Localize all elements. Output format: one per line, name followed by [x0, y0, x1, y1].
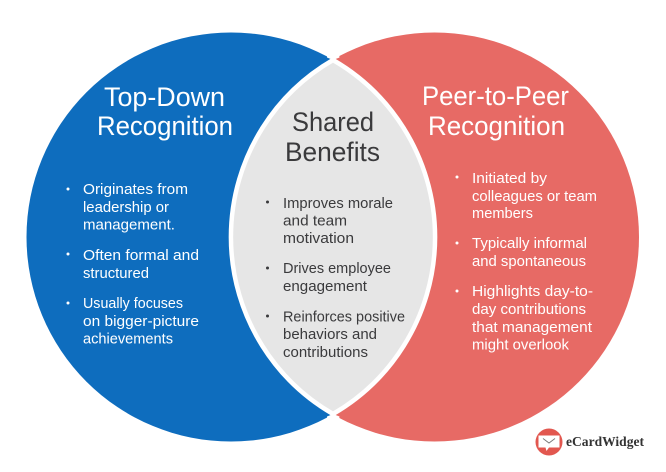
heading: shared benefits: Shared [292, 107, 374, 137]
text block: peer-to-peer bullet list: members [472, 206, 533, 222]
text block: top-down bullet list: achievements [83, 332, 173, 348]
text block: shared benefits bullet list: behaviors and [283, 327, 377, 343]
text block: shared benefits bullet list: engagement [283, 279, 367, 295]
heading: shared benefits [285, 107, 380, 167]
heading: peer-to-peer recognition [422, 81, 569, 141]
text block: shared benefits bullet list: motivation [283, 231, 354, 247]
text block: shared benefits bullet list: Improves morale [283, 196, 393, 212]
text block: peer-to-peer bullet list: that management [472, 320, 592, 336]
text block: peer-to-peer bullet list [456, 171, 597, 354]
text block: shared benefits bullet list [266, 196, 405, 361]
text block: top-down bullet list: management. [83, 218, 175, 234]
panel: shared benefits overlap [231, 60, 435, 414]
text block: top-down bullet list: Often formal and [83, 248, 199, 264]
heading: shared benefits: Benefits [285, 137, 380, 167]
text block: shared benefits bullet list: Drives employee [283, 261, 391, 277]
text block: peer-to-peer bullet list: Typically informal [472, 236, 587, 252]
heading: peer-to-peer recognition: Recognition [428, 111, 565, 141]
text block: peer-to-peer bullet list: day contributions [472, 302, 586, 318]
text block: top-down bullet list [66, 182, 199, 348]
logo: eCardWidget [536, 428, 644, 456]
heading: peer-to-peer recognition: Peer-to-Peer [422, 81, 569, 111]
panel: top-down recognition circle [26, 32, 436, 442]
text block: peer-to-peer bullet list: Initiated by [472, 171, 548, 187]
text block: shared benefits bullet list: and team [283, 214, 347, 230]
heading: top-down recognition: Top-Down [104, 82, 225, 112]
text block: peer-to-peer bullet list: colleagues or team [472, 189, 597, 205]
text block: peer-to-peer bullet list: Highlights day-to- [472, 284, 593, 300]
text block: top-down bullet list: on bigger-picture [83, 314, 199, 330]
logo wordmark: eCardWidget [566, 435, 644, 450]
text block: shared benefits bullet list: Reinforces positive [283, 310, 405, 326]
text block: top-down bullet list: Originates from [83, 182, 188, 198]
text block: shared benefits bullet list: contributions [283, 345, 368, 361]
text block: top-down bullet list: leadership or [83, 200, 169, 216]
text block: peer-to-peer bullet list: might overlook [472, 338, 570, 354]
heading: top-down recognition: Recognition [97, 111, 233, 141]
icon: envelope speech bubble [536, 428, 562, 456]
text block: peer-to-peer bullet list: and spontaneous [472, 254, 586, 270]
text block: top-down bullet list: Usually focuses [83, 296, 183, 312]
text block: top-down bullet list: structured [83, 266, 149, 282]
heading: top-down recognition [97, 82, 233, 141]
panel: peer-to-peer recognition circle [230, 32, 639, 442]
